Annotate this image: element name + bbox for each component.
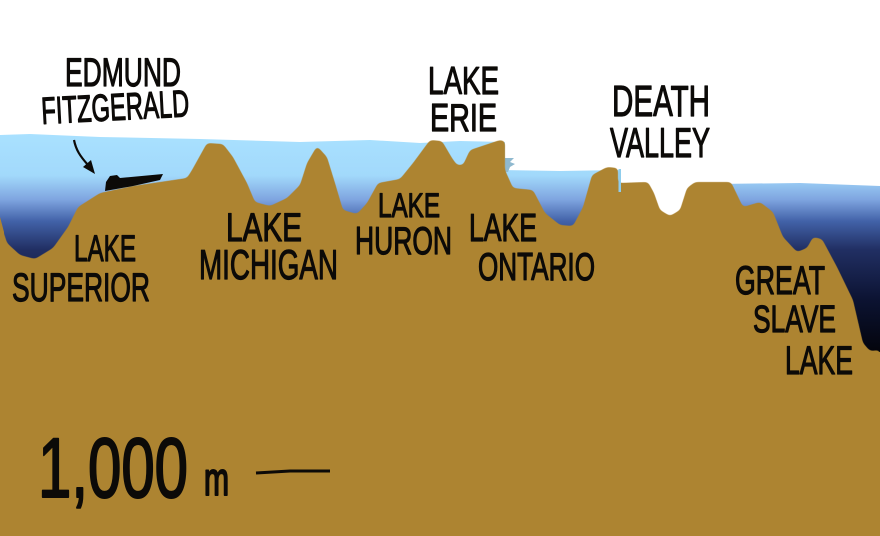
label: Great Slave Lake	[735, 259, 853, 383]
label: Lake Huron: HURON	[355, 220, 452, 263]
arrow to shipwreck	[74, 140, 95, 174]
label: Edmund Fitzgerald	[40, 51, 190, 133]
label: Death Valley: VALLEY	[610, 119, 710, 166]
label: Lake Erie: LAKE	[428, 60, 499, 103]
label: Edmund Fitzgerald: FITZGERALD	[40, 83, 190, 133]
label: Lake Huron: LAKE	[378, 187, 440, 225]
scale: 1,000 m: 1,000	[38, 421, 188, 515]
label: Death Valley	[610, 77, 710, 166]
water sliver by Death Valley	[618, 169, 621, 192]
label: Death Valley: DEATH	[612, 77, 710, 126]
waterfall spray	[505, 158, 515, 172]
label: Lake Erie: ERIE	[430, 97, 497, 140]
label: Lake Michigan	[199, 206, 338, 288]
icon: Edmund Fitzgerald shipwreck	[105, 174, 163, 191]
label: Lake Erie	[428, 60, 499, 140]
label: Lake Superior: SUPERIOR	[12, 266, 150, 310]
label: Lake Superior	[12, 228, 150, 310]
label: Lake Huron	[355, 187, 452, 263]
land profile	[0, 140, 880, 536]
water: lakes cross-section	[0, 134, 880, 360]
label: Edmund Fitzgerald: EDMUND	[65, 51, 181, 95]
label: Lake Superior: LAKE	[74, 228, 136, 269]
label: Lake Michigan: LAKE	[226, 206, 302, 250]
label: Great Slave Lake: SLAVE	[753, 299, 836, 341]
label: Lake Ontario: LAKE	[469, 207, 537, 250]
label: Lake Ontario: ONTARIO	[478, 246, 595, 289]
label: Great Slave Lake: GREAT	[735, 259, 825, 303]
label: Lake Michigan: MICHIGAN	[199, 241, 338, 288]
scale: 1,000 m: m	[204, 453, 229, 505]
label: Lake Ontario	[469, 207, 595, 289]
